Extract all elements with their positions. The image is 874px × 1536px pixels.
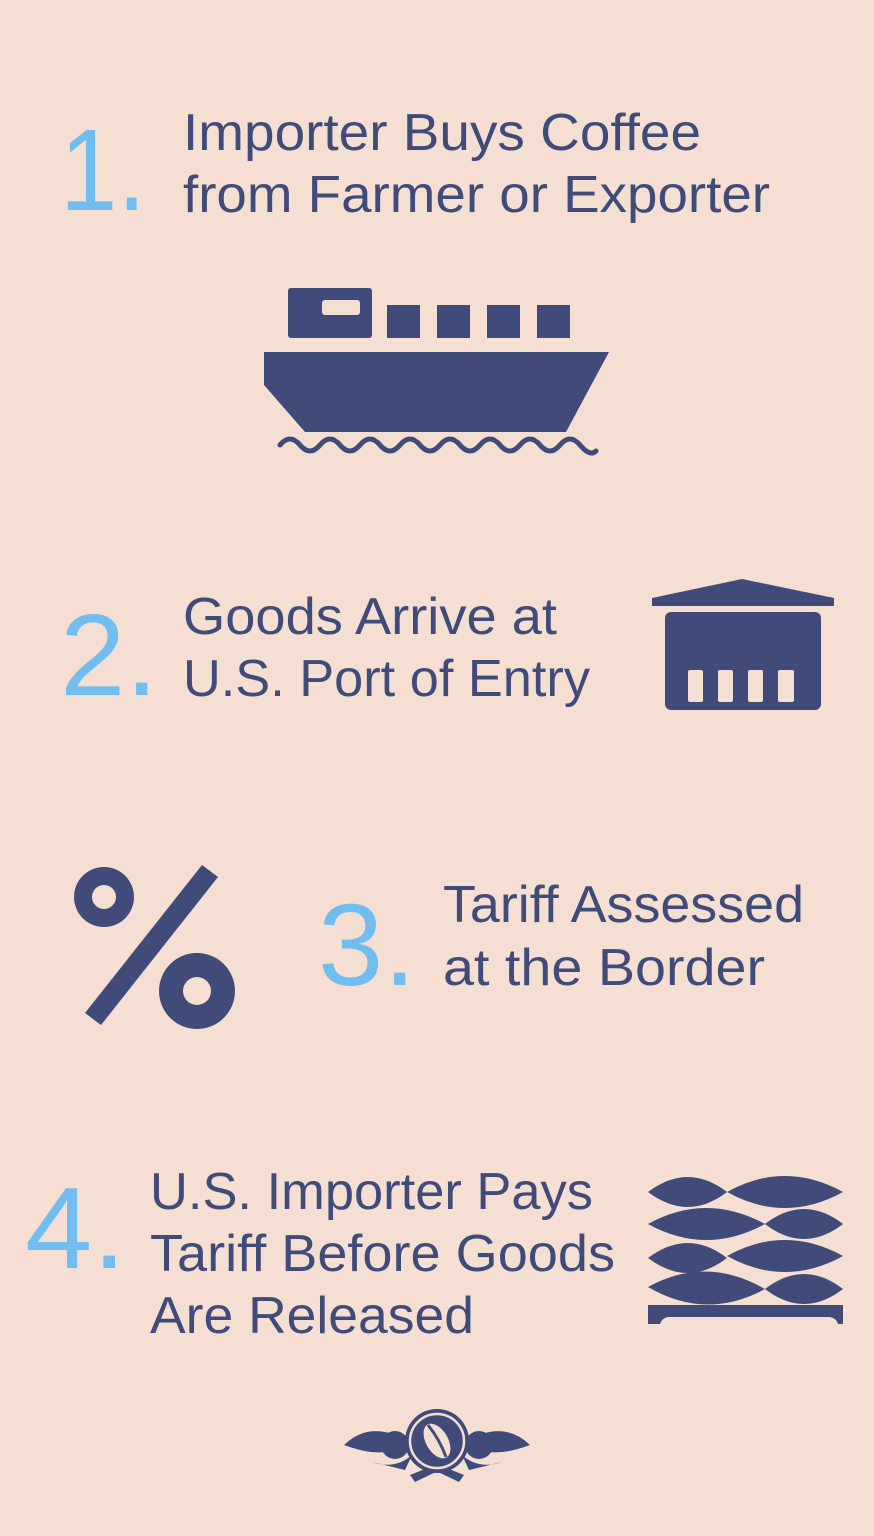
step 2 heading: Goods Arrive at (183, 588, 558, 646)
step 3 heading (443, 876, 804, 997)
logo (344, 1409, 530, 1482)
step 4 heading: Are Released (150, 1287, 474, 1345)
step 2 heading: U.S. Port of Entry (183, 650, 590, 708)
step 3 heading: Tariff Assessed (443, 876, 804, 934)
step 4 heading: Tariff Before Goods (150, 1225, 615, 1283)
step 4 heading (150, 1163, 615, 1345)
step 2 number: 2. (60, 590, 158, 720)
icon: cargo ship (264, 288, 609, 453)
step 2 heading (183, 588, 590, 708)
icon: warehouse (652, 579, 834, 710)
icon: percent (74, 865, 235, 1029)
step 4 number: 4. (25, 1163, 126, 1293)
icon: coffee sacks on pallet (648, 1176, 843, 1324)
step 1 number: 1. (60, 105, 146, 235)
step 3 number: 3. (318, 880, 416, 1010)
step 1 heading: from Farmer or Exporter (183, 166, 770, 224)
step 1 heading (183, 104, 770, 224)
step 4 heading: U.S. Importer Pays (150, 1163, 593, 1221)
step 3 heading: at the Border (443, 939, 765, 997)
step 1 heading: Importer Buys Coffee (183, 104, 701, 162)
